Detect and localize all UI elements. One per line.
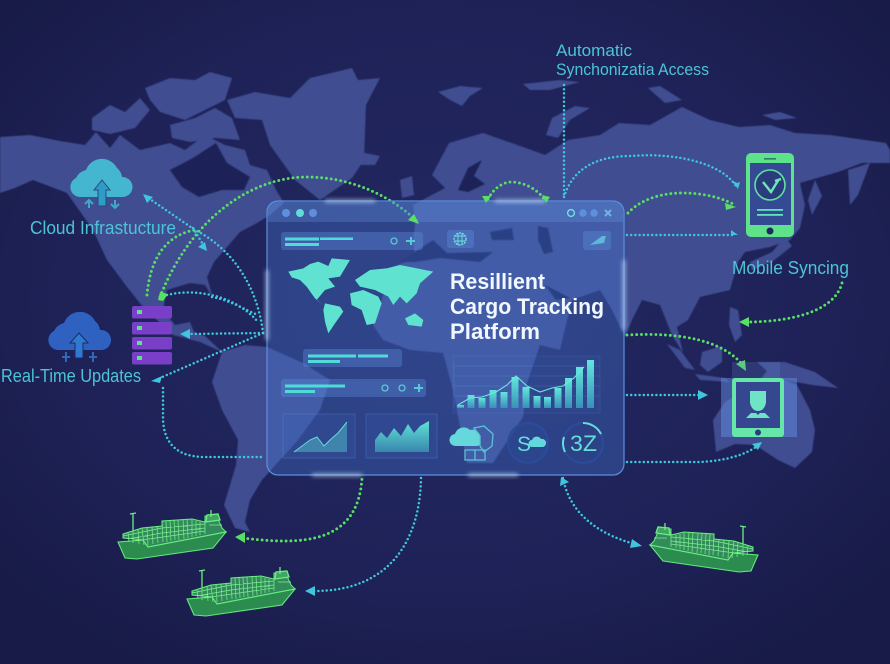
Eurasia and Africa: [373, 107, 890, 463]
inland seas: [170, 143, 570, 300]
icon: cargo ship one: [118, 510, 226, 559]
mini area chart two: [366, 414, 437, 458]
title: Cargo Tracking: [450, 294, 604, 319]
window controls right: [568, 209, 611, 217]
Borneo: [700, 346, 722, 372]
Sumatra: [667, 344, 695, 370]
Java: [695, 374, 730, 382]
label: automatic synchronization: [556, 41, 709, 79]
icon: tablet: [721, 362, 797, 437]
Arctic islands: [92, 98, 150, 134]
title: [450, 269, 604, 344]
label: real-time updates: Real-Time Updates: [1, 366, 141, 386]
South America: [212, 345, 330, 532]
icon: cloud and boxes: [449, 426, 493, 460]
status row two: [303, 349, 402, 367]
label: mobile syncing: Mobile Syncing: [732, 258, 849, 278]
panel edge glows: [266, 200, 625, 476]
Kamchatka: [848, 163, 870, 205]
gauge: S and cloud: [508, 423, 548, 463]
Iceland: [352, 153, 380, 165]
Greenland: [227, 68, 380, 200]
title: Resillient: [450, 269, 546, 294]
mini area chart one: [283, 414, 355, 458]
Philippines: [729, 307, 742, 342]
chart button: [583, 231, 611, 250]
icon: server stack: [132, 306, 172, 364]
icon: cargo ship three: [650, 523, 758, 572]
gauge: 3Z: [563, 423, 603, 463]
status row three: [281, 379, 426, 397]
arrowheads: [143, 180, 762, 596]
label: cloud infrastructure: Cloud Infrastucture: [30, 218, 176, 238]
Australia: [713, 363, 815, 468]
world map background: [0, 68, 890, 532]
Svalbard and Arctic islands: [438, 86, 483, 106]
Sakhalin and Japan: [808, 180, 822, 215]
bar chart: [453, 356, 600, 413]
top bar: [268, 202, 623, 222]
label: automatic synchronization: Automatic: [556, 41, 632, 60]
icon: mobile phone: [746, 153, 794, 237]
gauge: 3Z: 3Z: [570, 431, 597, 456]
Britain: [400, 176, 414, 198]
panel: platform window: [266, 200, 625, 476]
mini world map: [288, 258, 433, 333]
connector arrows behind panel: [147, 85, 842, 591]
label: automatic synchronization: Synchonizatia Access: [556, 60, 709, 79]
icon: cloud infrastructure: [70, 159, 133, 208]
title: Platform: [450, 319, 540, 344]
icon: real-time cloud: [48, 312, 111, 362]
globe button: [447, 230, 474, 248]
gauge: S and cloud: S: [517, 433, 531, 456]
panel body: [267, 201, 624, 475]
icon: cargo ship two: [187, 567, 295, 616]
window controls left: [282, 209, 317, 217]
New Guinea: [757, 362, 838, 388]
North America: [0, 132, 284, 352]
toolbar row one: [281, 232, 423, 250]
